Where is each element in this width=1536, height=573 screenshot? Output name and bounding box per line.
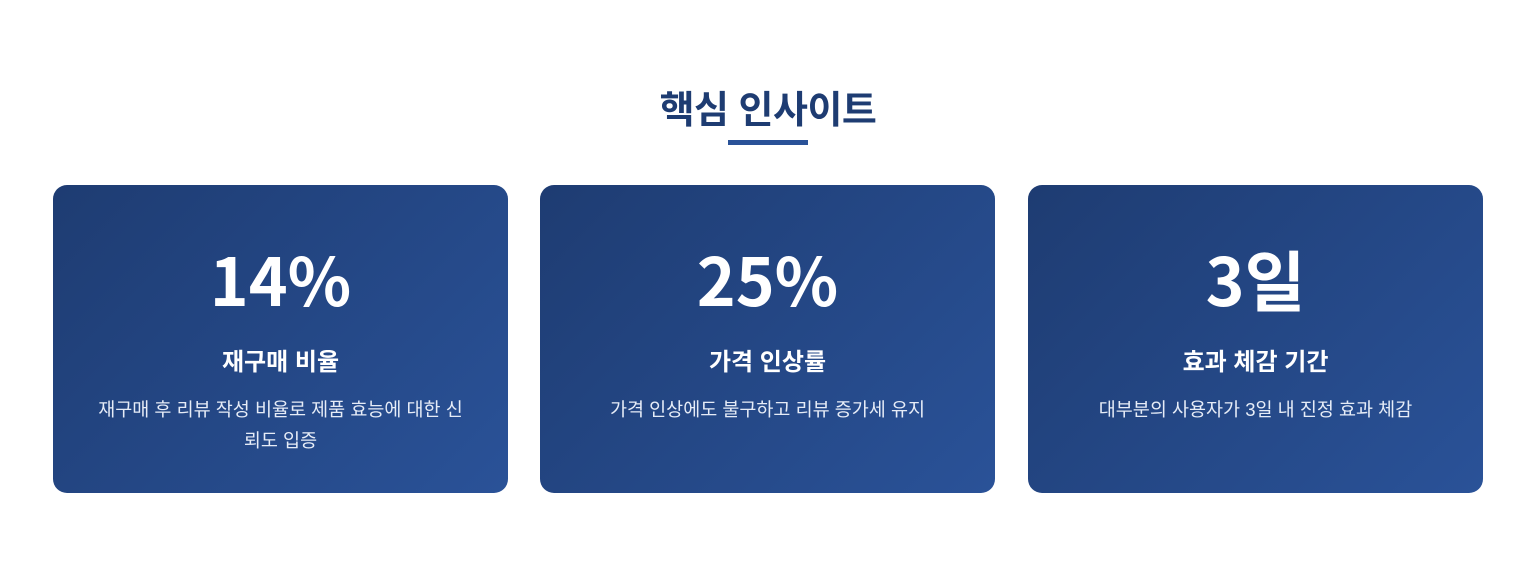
stat number: 3일 <box>1206 230 1305 326</box>
title: 핵심 인사이트 <box>660 90 876 132</box>
panel: price increase <box>540 185 995 493</box>
card heading: 가격 인상률 <box>709 349 826 376</box>
title underline <box>728 140 808 145</box>
stat number: 25% <box>697 230 838 326</box>
card heading: 효과 체감 기간 <box>1183 349 1328 376</box>
card description: 가격 인상에도 불구하고 리뷰 증가세 유지 <box>610 399 925 420</box>
panel: effect period <box>1028 185 1483 493</box>
stat number: 14% <box>210 230 351 326</box>
card description: 재구매 후 리뷰 작성 비율로 제품 효능에 대한 신뢰도 입증 <box>98 399 463 451</box>
card heading: 재구매 비율 <box>222 349 339 376</box>
panel: repurchase ratio <box>53 185 508 493</box>
card description: 대부분의 사용자가 3일 내 진정 효과 체감 <box>1099 399 1412 420</box>
